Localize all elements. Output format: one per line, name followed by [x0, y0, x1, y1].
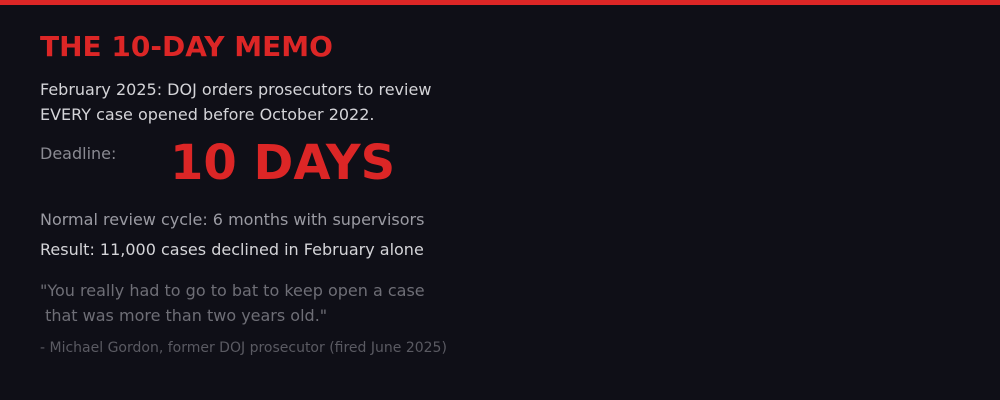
intro text: [40, 80, 431, 124]
normal review cycle: Normal review cycle: 6 months with supervisors: [40, 210, 424, 229]
quote: that was more than two years old.": [45, 306, 327, 325]
deadline label: Deadline:: [40, 144, 116, 163]
intro text: February 2025: DOJ orders prosecutors to review: [40, 80, 431, 99]
intro text: EVERY case opened before October 2022.: [40, 105, 374, 124]
attribution: - Michael Gordon, former DOJ prosecutor (fired June 2025): [40, 340, 447, 356]
quote: "You really had to go to bat to keep open a case: [40, 281, 425, 300]
quote: [40, 281, 425, 325]
deadline value: 10 DAYS: [170, 135, 395, 191]
title: THE 10-DAY MEMO: [40, 30, 333, 63]
result: Result: 11,000 cases declined in February alone: [40, 240, 424, 259]
top accent bar: [0, 0, 1000, 5]
